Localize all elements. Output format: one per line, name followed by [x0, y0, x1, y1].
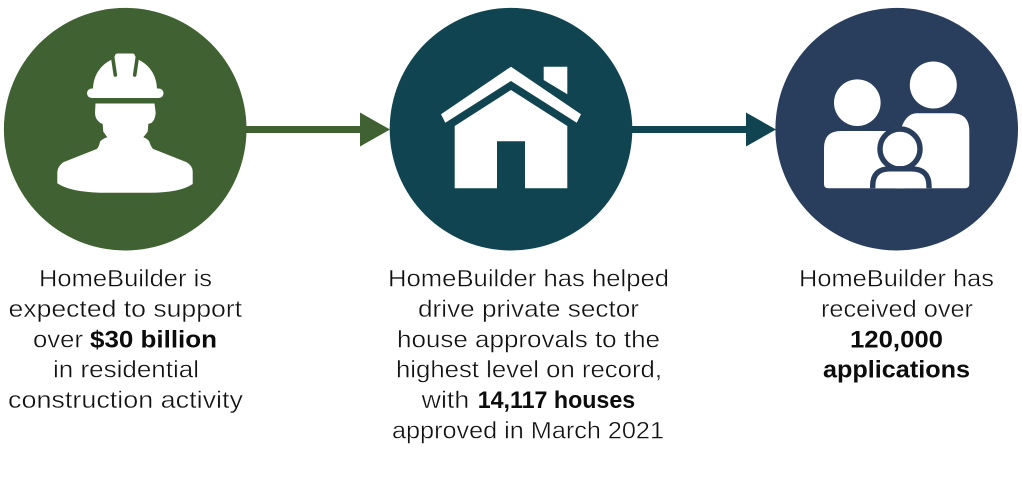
panel: applications	[775, 8, 1018, 384]
text: $30 billion: in residential	[53, 357, 199, 384]
text: 14,117 houses: HomeBuilder has helped	[388, 266, 669, 293]
text: 120,000 applications: 120,000	[850, 326, 943, 353]
text: 14,117 houses: house approvals to the	[397, 326, 660, 353]
text: $30 billion	[8, 266, 243, 414]
icon: family	[824, 62, 969, 188]
arrow: teal	[632, 112, 776, 146]
text: 14,117 houses: drive private sector	[418, 296, 639, 323]
teal circle	[390, 8, 632, 250]
text: $30 billion: HomeBuilder is	[39, 266, 212, 293]
text: 120,000 applications: applications	[823, 357, 970, 384]
text: 120,000 applications: received over	[821, 296, 973, 323]
icon: construction worker	[57, 54, 193, 193]
text: $30 billion: over	[33, 326, 83, 353]
navy circle	[775, 8, 1018, 250]
text: 14,117 houses	[388, 266, 669, 444]
panel: house approvals	[388, 8, 669, 444]
icon: house	[441, 67, 581, 188]
text: $30 billion: expected to support	[8, 296, 242, 323]
green circle	[4, 8, 246, 250]
text: 14,117 houses: with	[421, 387, 469, 414]
text: 120,000 applications: HomeBuilder has	[799, 266, 994, 293]
text: 14,117 houses: 14,117 houses	[478, 387, 635, 414]
text: 14,117 houses: approved in March 2021	[392, 417, 664, 444]
text: 14,117 houses: highest level on record,	[396, 357, 662, 384]
arrow: green	[246, 112, 390, 146]
text: $30 billion: $30 billion	[90, 326, 217, 353]
text: 120,000 applications	[799, 266, 994, 384]
text: $30 billion: construction activity	[8, 387, 243, 414]
panel: construction activity	[4, 8, 246, 414]
